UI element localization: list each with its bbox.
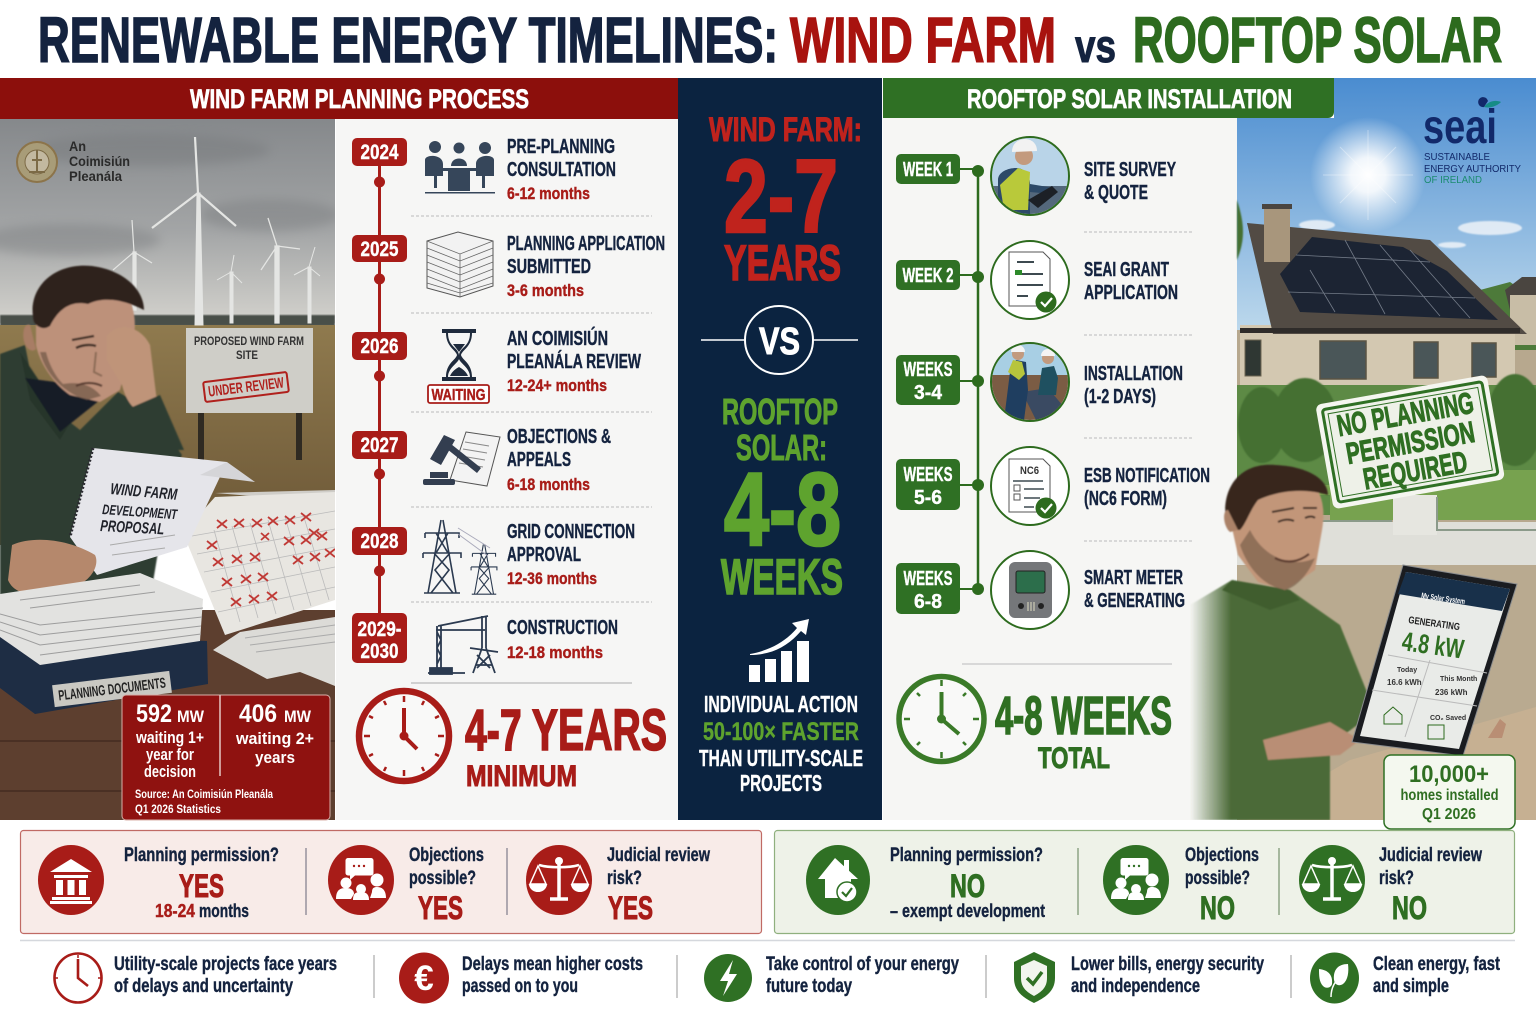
step: 2025 planning application: PLANNING APPLICATION bbox=[507, 233, 665, 255]
panel: wind farm requirements: Objections bbox=[409, 845, 484, 866]
step: 2028 grid connection: APPROVAL bbox=[507, 544, 581, 566]
heading: wind farm planning process bbox=[0, 78, 678, 119]
step: 2028 grid connection: GRID CONNECTION bbox=[507, 521, 635, 543]
step: 2028 grid connection: 12-36 months bbox=[507, 569, 597, 588]
step: 2025 planning application: SUBMITTED bbox=[507, 256, 591, 278]
logo: An Coimisiún Pleanála bbox=[17, 138, 130, 184]
takeaway: clean energy bbox=[1310, 952, 1501, 1004]
panel: rooftop solar requirements: Objections bbox=[1185, 845, 1259, 866]
title: vs bbox=[1075, 20, 1116, 72]
step: 2024 pre-planning consultation: 2024 bbox=[360, 141, 399, 164]
step: 2026 commission review: WAITING bbox=[432, 387, 486, 404]
wind farm site sign: UNDER REVIEW bbox=[207, 374, 285, 401]
total: 4-8 weeks bbox=[899, 676, 1172, 775]
step: week 2 SEAI grant bbox=[896, 241, 1178, 319]
title: RENEWABLE ENERGY TIMELINES: bbox=[38, 4, 778, 76]
icon: scales of justice bbox=[526, 845, 592, 915]
statistics box: MW waiting bbox=[122, 695, 330, 820]
tablet with solar system app: My Solar System bbox=[1421, 591, 1466, 606]
statistics box: MW waiting: Source: An Coimisiún Pleanála bbox=[135, 787, 273, 801]
panel: left photo of worried developer bbox=[0, 118, 340, 820]
panel: centre comparison: 4-8 bbox=[724, 452, 841, 568]
step: weeks 6-8 smart meter: WEEKS bbox=[904, 568, 952, 590]
proposal document: DEVELOPMENT bbox=[102, 501, 179, 522]
total: 4-7 years: MINIMUM bbox=[466, 760, 577, 793]
panel: rooftop solar requirements: NO bbox=[1200, 890, 1235, 926]
panel: wind farm requirements: Planning permission? bbox=[124, 845, 279, 866]
step: weeks 5-6 ESB notification bbox=[896, 447, 1210, 525]
duration: 18-24 months: 18-24 bbox=[155, 901, 195, 921]
stamp: no planning permission required bbox=[1319, 378, 1502, 506]
logo: An Coimisiún Pleanála: An bbox=[69, 138, 86, 154]
step: week 2 SEAI grant: APPLICATION bbox=[1084, 282, 1178, 304]
statistics box: MW waiting: decision bbox=[144, 763, 196, 781]
step: week 1 site survey bbox=[896, 136, 1176, 220]
step: 2029-2030 construction: 2029- bbox=[358, 618, 402, 641]
wind farm site sign bbox=[186, 328, 313, 460]
panel: centre comparison: INDIVIDUAL ACTION bbox=[704, 691, 858, 717]
panel: centre comparison: SOLAR: bbox=[736, 427, 827, 468]
table bbox=[1330, 707, 1536, 820]
panel: wind farm requirements: YES bbox=[608, 890, 653, 926]
step: 2024 pre-planning consultation: CONSULTATION bbox=[507, 159, 616, 181]
step: week 1 site survey: WEEK 1 bbox=[903, 159, 953, 181]
panel: wind farm requirements: possible? bbox=[409, 868, 476, 889]
step: 2025 planning application: 3-6 months bbox=[507, 281, 584, 300]
statistics box: MW waiting: MW bbox=[284, 707, 312, 726]
tablet with solar system app: This Month bbox=[1440, 676, 1477, 683]
panel: centre comparison: ROOFTOP bbox=[722, 391, 838, 432]
step: 2026 commission review bbox=[352, 326, 641, 404]
panel: wind farm planning timeline bbox=[336, 118, 678, 820]
panel: wind farm requirements bbox=[20, 830, 762, 934]
heading: wind farm planning process: WIND FARM PLANNING PROCESS bbox=[190, 84, 529, 114]
garden bbox=[1237, 385, 1536, 515]
icon: scales bbox=[1299, 845, 1365, 915]
step: weeks 6-8 smart meter: & GENERATING bbox=[1084, 590, 1185, 612]
statistics box: MW waiting: 592 bbox=[136, 700, 172, 728]
logo: SEAI: OF IRELAND bbox=[1424, 174, 1482, 186]
panel: rooftop solar requirements: risk? bbox=[1379, 868, 1414, 889]
heading: rooftop solar installation bbox=[883, 78, 1334, 118]
neighbouring greenery and house bbox=[1480, 282, 1536, 350]
step: 2025 planning application: 2025 bbox=[360, 238, 399, 261]
step: 2029-2030 construction: 2030 bbox=[360, 640, 398, 663]
worried man bbox=[0, 266, 184, 600]
takeaway: control: Take control of your energy bbox=[766, 954, 959, 975]
step: weeks 6-8 smart meter: 6-8 bbox=[914, 591, 942, 613]
total: 4-8 weeks: 4-8 WEEKS bbox=[995, 686, 1172, 746]
statistic badge: 10,000+ homes bbox=[1384, 755, 1515, 829]
tablet with solar system app: 4.8 kW bbox=[1400, 626, 1466, 665]
panel: rooftop solar timeline bbox=[883, 118, 1238, 820]
tablet with solar system app: GENERATING bbox=[1408, 615, 1461, 633]
takeaway: delays bbox=[54, 954, 337, 1002]
takeaway: costs: Delays mean higher costs bbox=[462, 954, 643, 975]
logo: An Coimisiún Pleanála: Pleanála bbox=[69, 168, 122, 184]
takeaway: independence: Lower bills, energy security bbox=[1071, 954, 1264, 975]
takeaway: control bbox=[704, 954, 959, 1002]
statistics box: MW waiting: years bbox=[255, 749, 295, 767]
statistics box: MW waiting: MW bbox=[177, 707, 205, 726]
panel: centre comparison bbox=[678, 78, 882, 820]
panel: centre comparison: PROJECTS bbox=[740, 770, 822, 796]
happy man with tablet bbox=[1190, 465, 1375, 820]
panel: rooftop solar requirements: NO bbox=[1392, 890, 1427, 926]
step: 2027 objections and appeals: 6-18 months bbox=[507, 475, 590, 494]
wind farm site sign: SITE bbox=[236, 348, 258, 362]
icon: house with check bbox=[806, 845, 870, 915]
panel: centre comparison: THAN UTILITY-SCALE bbox=[699, 745, 863, 771]
duration: 18-24 months: months bbox=[199, 901, 249, 921]
step: 2026 commission review: AN COIMISIÚN bbox=[507, 326, 608, 350]
calendar with crossed-out dates bbox=[183, 490, 335, 635]
vs badge: VS bbox=[759, 321, 800, 363]
step: week 1 site survey: SITE SURVEY bbox=[1084, 159, 1176, 181]
step: weeks 3-4 installation: INSTALLATION bbox=[1084, 363, 1183, 385]
panel: centre comparison: YEARS bbox=[724, 235, 841, 291]
panel: rooftop solar requirements: Planning permission? bbox=[890, 845, 1043, 866]
wind farm site sign: PROPOSED WIND FARM bbox=[194, 334, 304, 348]
planning documents binder: PLANNING DOCUMENTS bbox=[58, 675, 167, 705]
heading: rooftop solar installation: ROOFTOP SOLAR INSTALLATION bbox=[967, 84, 1292, 114]
step: weeks 5-6 ESB notification: 5-6 bbox=[914, 487, 942, 509]
panel: wind farm requirements: Judicial review bbox=[607, 845, 710, 866]
panel: rooftop solar requirements: – exempt development bbox=[890, 901, 1045, 921]
panel: wind farm requirements: risk? bbox=[607, 868, 642, 889]
step: weeks 3-4 installation: WEEKS bbox=[904, 359, 952, 381]
step: 2028 grid connection: 2028 bbox=[360, 530, 399, 553]
panel: centre comparison: 50-100× FASTER bbox=[703, 718, 859, 746]
step: 2029-2030 construction: 12-18 months bbox=[507, 643, 603, 662]
panel: rooftop solar requirements: possible? bbox=[1185, 868, 1250, 889]
panel: wind farm requirements: YES bbox=[418, 890, 463, 926]
step: 2026 commission review: 2026 bbox=[360, 335, 398, 358]
planning documents binder bbox=[0, 573, 208, 714]
step: weeks 5-6 ESB notification: NC6 bbox=[1020, 465, 1039, 477]
total: 4-8 weeks: TOTAL bbox=[1038, 742, 1110, 775]
step: 2024 pre-planning consultation: 6-12 months bbox=[507, 184, 590, 203]
step: 2027 objections and appeals: APPEALS bbox=[507, 449, 571, 471]
step: 2027 objections and appeals: OBJECTIONS & bbox=[507, 426, 611, 448]
statistic badge: 10,000+ homes: homes installed bbox=[1400, 787, 1498, 804]
icon: government building bbox=[38, 845, 104, 915]
turbines bbox=[113, 137, 320, 325]
step: 2024 pre-planning consultation: PRE-PLANNING bbox=[507, 136, 615, 158]
step: 2028 grid connection bbox=[352, 520, 635, 594]
logo: SEAI bbox=[1423, 97, 1521, 186]
statistics box: MW waiting: Q1 2026 Statistics bbox=[135, 802, 221, 816]
icon: people objecting bbox=[328, 845, 394, 915]
total: 4-7 years: 4-7 YEARS bbox=[465, 698, 667, 763]
stamp: no planning permission required: PERMISSION bbox=[1344, 416, 1477, 471]
takeaway: delays: Utility-scale projects face years bbox=[114, 954, 337, 975]
proposal document: PROPOSAL bbox=[100, 518, 165, 538]
step: weeks 3-4 installation: 3-4 bbox=[914, 382, 943, 404]
step: 2029-2030 construction bbox=[352, 613, 618, 674]
panel: right photo of house and homeowner bbox=[1190, 78, 1536, 820]
logo: SEAI: ENERGY AUTHORITY bbox=[1424, 163, 1521, 175]
loose papers bbox=[213, 617, 335, 686]
statistics box: MW waiting: waiting 2+ bbox=[235, 730, 314, 748]
tablet with solar system app: CO₂ Saved bbox=[1430, 715, 1466, 722]
bottom takeaways row bbox=[20, 940, 1515, 1004]
statistic badge: 10,000+ homes: Q1 2026 bbox=[1422, 806, 1476, 823]
takeaway: costs: passed on to you bbox=[462, 976, 578, 997]
takeaway: costs: € bbox=[414, 959, 434, 998]
logo: SEAI: seai bbox=[1423, 101, 1497, 154]
step: 2025 planning application bbox=[352, 232, 665, 300]
step: weeks 6-8 smart meter: SMART METER bbox=[1084, 567, 1183, 589]
stamp: no planning permission required: REQUIRED bbox=[1361, 446, 1470, 496]
takeaway: costs bbox=[399, 952, 643, 1004]
step: weeks 5-6 ESB notification: (NC6 FORM) bbox=[1084, 488, 1167, 510]
step: weeks 3-4 installation: (1-2 DAYS) bbox=[1084, 386, 1156, 408]
step: 2027 objections and appeals bbox=[352, 426, 611, 494]
tablet with solar system app: 16.6 kWh bbox=[1387, 678, 1422, 687]
icon: rising bar chart bbox=[749, 619, 809, 682]
total: 4-7 years bbox=[359, 691, 667, 793]
statistic badge: 10,000+ homes: 10,000+ bbox=[1409, 761, 1489, 788]
statistics box: MW waiting: waiting 1+ bbox=[135, 729, 204, 747]
panel: rooftop solar requirements: Judicial review bbox=[1379, 845, 1482, 866]
step: week 1 site survey: & QUOTE bbox=[1084, 182, 1148, 204]
logo: SEAI: SUSTAINABLE bbox=[1424, 151, 1490, 163]
duration: 18-24 months bbox=[155, 901, 249, 921]
step: 2029-2030 construction: CONSTRUCTION bbox=[507, 617, 618, 639]
panel: rooftop solar requirements bbox=[774, 830, 1514, 934]
step: 2027 objections and appeals: 2027 bbox=[360, 434, 398, 457]
proposal document: WIND FARM bbox=[110, 481, 178, 504]
step: week 2 SEAI grant: WEEK 2 bbox=[902, 265, 954, 287]
panel: centre comparison: 2-7 bbox=[724, 139, 838, 255]
takeaway: independence: and independence bbox=[1071, 976, 1200, 997]
panel: centre comparison: WEEKS bbox=[721, 549, 843, 605]
takeaway: clean energy: Clean energy, fast bbox=[1373, 954, 1501, 975]
panel: centre comparison: WIND FARM: bbox=[709, 111, 862, 149]
step: weeks 5-6 ESB notification: WEEKS bbox=[904, 464, 952, 486]
house with solar panels bbox=[1240, 204, 1527, 395]
statistics box: MW waiting: 406 bbox=[239, 700, 277, 728]
panel: wind farm requirements: YES bbox=[179, 868, 224, 904]
tablet with solar system app: 236 kWh bbox=[1435, 688, 1468, 697]
panel: rooftop solar requirements: NO bbox=[950, 868, 985, 904]
step: 2024 pre-planning consultation bbox=[352, 136, 616, 203]
takeaway: control: future today bbox=[766, 976, 852, 997]
step: 2026 commission review: PLEANÁLA REVIEW bbox=[507, 350, 641, 373]
tablet with solar system app bbox=[1352, 565, 1517, 756]
proposal document bbox=[8, 448, 255, 595]
step: weeks 6-8 smart meter bbox=[896, 551, 1185, 629]
window frame and interior bbox=[1237, 485, 1536, 565]
step: 2026 commission review: 12-24+ months bbox=[507, 376, 607, 395]
takeaway: clean energy: and simple bbox=[1373, 976, 1449, 997]
takeaway: delays: of delays and uncertainty bbox=[114, 976, 293, 997]
step: weeks 5-6 ESB notification: ESB NOTIFICATION bbox=[1084, 465, 1210, 487]
takeaway: independence bbox=[1014, 952, 1264, 1003]
statistics box: MW waiting: year for bbox=[146, 746, 194, 764]
table bbox=[0, 610, 335, 820]
step: weeks 3-4 installation bbox=[896, 342, 1183, 425]
logo: An Coimisiún Pleanála: Coimisiún bbox=[69, 153, 130, 169]
vs badge bbox=[701, 306, 858, 374]
icon: people bbox=[1103, 845, 1169, 915]
title: WIND FARM bbox=[790, 4, 1056, 76]
step: week 2 SEAI grant: SEAI GRANT bbox=[1084, 259, 1169, 281]
tablet with solar system app: Today bbox=[1397, 667, 1417, 674]
